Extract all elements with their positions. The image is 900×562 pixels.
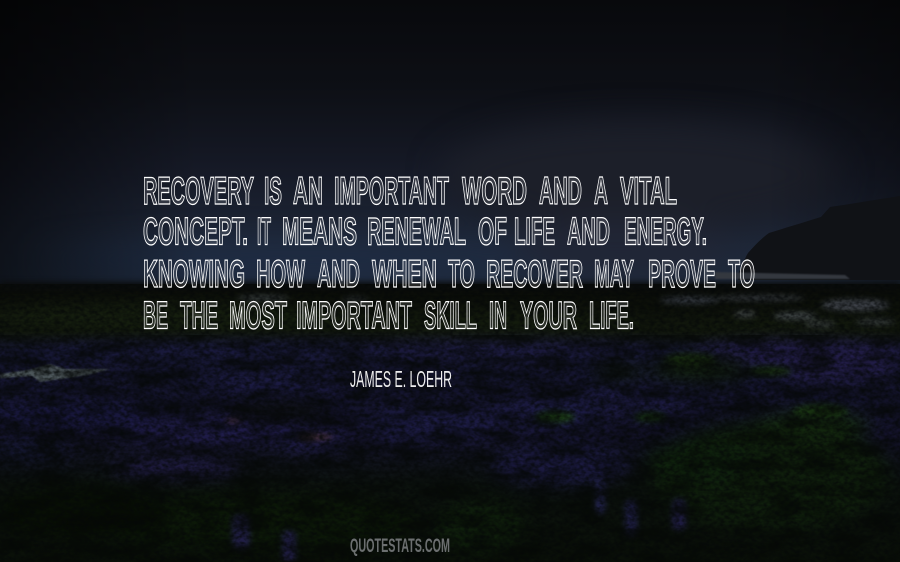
quote line 2: RENEWAL [367,210,466,254]
quote line 3: MAY [594,253,634,296]
quote line 1: IS [264,170,282,213]
quote line 3: KNOWING [143,253,245,296]
quote line 3: RECOVER [486,253,583,296]
quote line 4: THE [180,294,218,338]
quote text: LIFE. [589,294,634,338]
quote line 4: IN [489,294,507,338]
quote line 4: BE [143,294,168,338]
quote line 2: OF [478,210,507,254]
texture grain [0,284,900,562]
quote line 4: IMPORTANT [296,294,412,338]
sky: vignette [0,0,900,290]
quote line 4: YOUR [520,294,577,338]
quote line 1: AND [539,170,582,213]
quote line 4: MOST [229,294,287,338]
distant water strip [715,272,850,279]
quote line 3: TO [448,253,475,296]
green strip of field [0,304,900,336]
lupine spikes [232,480,686,562]
bright bushes [535,353,848,423]
quote line 2 [143,210,707,254]
quote line 1: IMPORTANT [334,170,449,213]
quote line 1: WORD [462,170,527,213]
lupine flower field [0,341,900,487]
texture mottling [0,335,900,562]
quote line 4: SKILL [424,294,477,338]
horizon band [0,282,900,290]
quote line 2: AND [567,210,610,254]
sky: cloud shading [40,120,840,276]
rust coloured earth [225,418,333,440]
quote line 3: PROVE [648,253,716,296]
quote line 1 [143,170,677,213]
quote line 3: TO [728,253,755,296]
quote text: ENERGY. [624,210,707,254]
quote line 2: IT [257,210,271,254]
quote line 3: AND [317,253,360,296]
cliff on the right [738,196,900,280]
quote line 2: LIFE [514,210,555,254]
quote line 1: AN [293,170,323,213]
green foliage patches [0,359,890,553]
snow patch on left [0,364,110,382]
quote line 3 [143,253,755,296]
quote line 2: CONCEPT. [143,210,248,254]
site watermark: QUOTESTATS.COM [350,536,450,557]
quote line 4 [143,294,634,338]
quote line 1: RECOVERY [143,170,254,213]
author name: JAMES E. LOEHR [350,366,452,392]
quote line 2: MEANS [282,210,357,254]
quote line 1: A [594,170,608,213]
quote text [143,170,755,338]
quote line 1: VITAL [620,170,677,213]
quote line 3: WHEN [372,253,437,296]
village houses [237,295,895,327]
background: night sky [0,0,900,290]
quote line 3: HOW [256,253,305,296]
background: dark meadow [0,284,900,562]
